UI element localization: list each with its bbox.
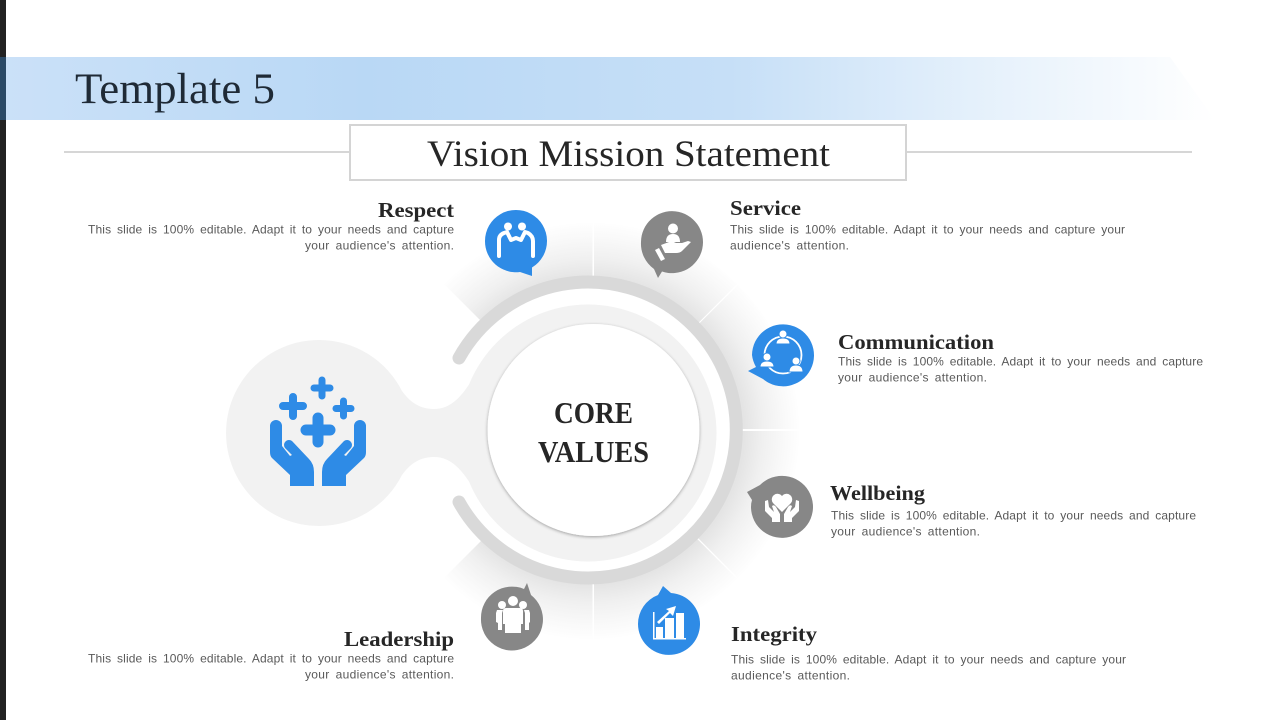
text: service — [730, 196, 1125, 252]
subtitle box — [64, 125, 1192, 180]
text: wellbeing: your audience's attention. — [831, 524, 980, 538]
icon: hands with plus signs — [270, 380, 366, 486]
text: leadership — [88, 627, 454, 682]
left blob with neck — [226, 340, 510, 526]
centre label: CORE — [554, 395, 633, 430]
text: leadership: your audience's attention. — [305, 668, 454, 682]
text: respect: your audience's attention. — [305, 238, 454, 252]
text: communication: your audience's attention. — [838, 370, 987, 384]
white disc under ring — [440, 284, 736, 580]
text: service: This slide is 100% editable. Adapt it to your needs and capture your — [730, 222, 1125, 236]
text: integrity: Integrity — [731, 622, 817, 646]
text: communication: This slide is 100% editable. Adapt it to your needs and capture — [838, 354, 1203, 368]
title: Template 5 — [75, 66, 275, 113]
text: leadership: Leadership — [344, 627, 454, 651]
centre circle — [488, 324, 700, 536]
icon: communication — [748, 324, 814, 386]
text: service: Service — [730, 196, 801, 220]
icon: integrity — [638, 586, 700, 655]
icon: leadership — [481, 583, 543, 650]
subtitle box: Vision Mission Statement — [427, 134, 831, 175]
text: integrity: This slide is 100% editable. Adapt it to your needs and capture your — [731, 652, 1126, 666]
icon: respect — [485, 210, 547, 276]
text: wellbeing — [830, 481, 1196, 538]
text: leadership: This slide is 100% editable. Adapt it to your needs and capture — [88, 652, 454, 666]
text: integrity: audience's attention. — [731, 668, 850, 682]
text: communication — [838, 330, 1203, 384]
text: respect: Respect — [378, 198, 455, 222]
text: integrity — [731, 622, 1126, 682]
light inner ring — [460, 304, 716, 562]
centre label: VALUES — [538, 434, 649, 469]
fan background segments — [444, 223, 799, 639]
icon: wellbeing — [747, 476, 813, 538]
text: communication: Communication — [838, 330, 994, 354]
text: respect — [88, 198, 455, 252]
grey ring arc — [459, 282, 736, 578]
text: wellbeing: Wellbeing — [830, 481, 925, 505]
text: respect: This slide is 100% editable. Adapt it to your needs and capture — [88, 222, 454, 236]
centre label — [538, 395, 649, 469]
text: wellbeing: This slide is 100% editable. Adapt it to your needs and capture — [831, 508, 1196, 522]
icon: service — [641, 211, 703, 278]
text: service: audience's attention. — [730, 238, 849, 252]
